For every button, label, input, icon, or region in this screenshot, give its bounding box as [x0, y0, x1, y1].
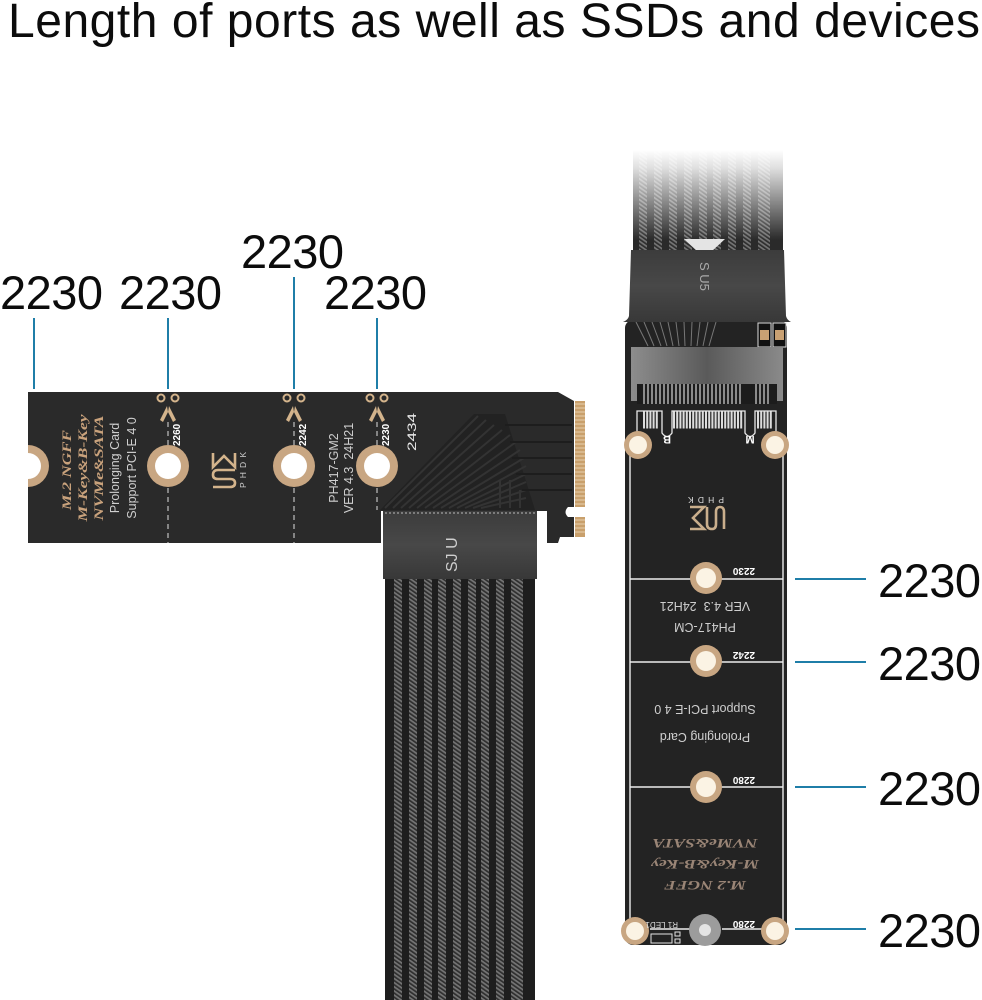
- ribbon solder fan: [636, 322, 716, 346]
- left PCB adapter board: 2242: [298, 423, 309, 446]
- fan of ribbon traces: [380, 414, 572, 510]
- right heat-shrink sleeve: S U5: [697, 262, 712, 291]
- solder pads: [637, 411, 776, 436]
- right PCB adapter board: Prolonging Card: [660, 730, 750, 744]
- left heat-shrink sleeve: SJ U: [444, 537, 461, 572]
- LED marks: [645, 920, 680, 943]
- left PCB adapter board: M-Key&B-Key: [75, 414, 90, 523]
- M.2 connector: [631, 347, 783, 404]
- right PCB adapter board: PH417-CM: [674, 620, 736, 634]
- right PCB adapter board: Support PCI-E 4 0: [654, 702, 756, 716]
- scissors marks: [158, 394, 388, 422]
- length holes: [690, 562, 722, 803]
- board silkscreen text: M.2 NGFF: [59, 430, 74, 511]
- length marks: 2260: [172, 423, 183, 446]
- gold fingers, long: [575, 401, 585, 507]
- key letter M: M: [745, 433, 755, 445]
- label: right 2230 bottom: 2230: [878, 904, 981, 957]
- label: left edge 2230: [0, 266, 103, 389]
- LED marks: R1 LED1: [645, 920, 678, 929]
- key letter B: B: [663, 433, 671, 445]
- capacitors: [758, 323, 786, 347]
- right PCB adapter board: PHDK: [688, 495, 724, 505]
- board outline and cut lines: [630, 452, 783, 929]
- label: third 2230: 2230: [241, 225, 344, 278]
- upside-down silkscreen text: 2230: [732, 565, 755, 576]
- gold fingers, short: [575, 517, 585, 537]
- left PCB adapter board: Support PCI-E 4 0: [125, 417, 139, 519]
- left PCB adapter board: NVMe&SATA: [91, 415, 106, 522]
- label: left edge 2230: 2230: [0, 266, 103, 319]
- left PCB adapter board: PH417-GM2: [327, 433, 341, 503]
- left PCB adapter board: 2230: [381, 423, 392, 446]
- bottom holes: [621, 914, 789, 946]
- right PCB adapter board: NVMe&SATA: [652, 836, 759, 851]
- label: right 2230 second: 2230: [878, 637, 981, 690]
- left PCB adapter board: Prolonging Card: [108, 423, 122, 513]
- left PCB adapter board: 2434: [405, 413, 419, 451]
- right ribbon cable with fade: [628, 150, 788, 255]
- label: fourth 2230: [324, 266, 427, 389]
- right heat-shrink sleeve: [623, 250, 791, 322]
- right PCB adapter board: 2242: [732, 649, 755, 660]
- mounting holes: [28, 445, 398, 487]
- right PCB adapter board: VER 4.3 24H21: [660, 599, 750, 613]
- left ribbon cable: [385, 575, 535, 1000]
- left PCB adapter board: VER 4.3 24H21: [342, 423, 356, 513]
- left heat-shrink sleeve: [383, 511, 537, 579]
- logo: [213, 452, 248, 488]
- label: second 2230: 2230: [119, 266, 222, 319]
- right PCB adapter board: M-Key&B-Key: [651, 857, 760, 872]
- label: right 2230 third: 2230: [878, 762, 981, 815]
- upside-down logo: [690, 507, 724, 529]
- top mounting holes: [624, 431, 789, 459]
- logo: PHDK: [238, 452, 248, 488]
- left PCB adapter board: [28, 392, 585, 543]
- right PCB adapter board: 2280: [732, 774, 755, 785]
- cut lines: [168, 422, 377, 543]
- right PCB adapter board: M.2 NGFF: [664, 878, 747, 893]
- label: fourth 2230: 2230: [324, 266, 427, 319]
- label: second 2230: [119, 266, 222, 389]
- right PCB adapter board: 2280: [732, 918, 755, 929]
- right PCB adapter board: [621, 320, 789, 946]
- label: right 2230 upper: 2230: [878, 554, 981, 607]
